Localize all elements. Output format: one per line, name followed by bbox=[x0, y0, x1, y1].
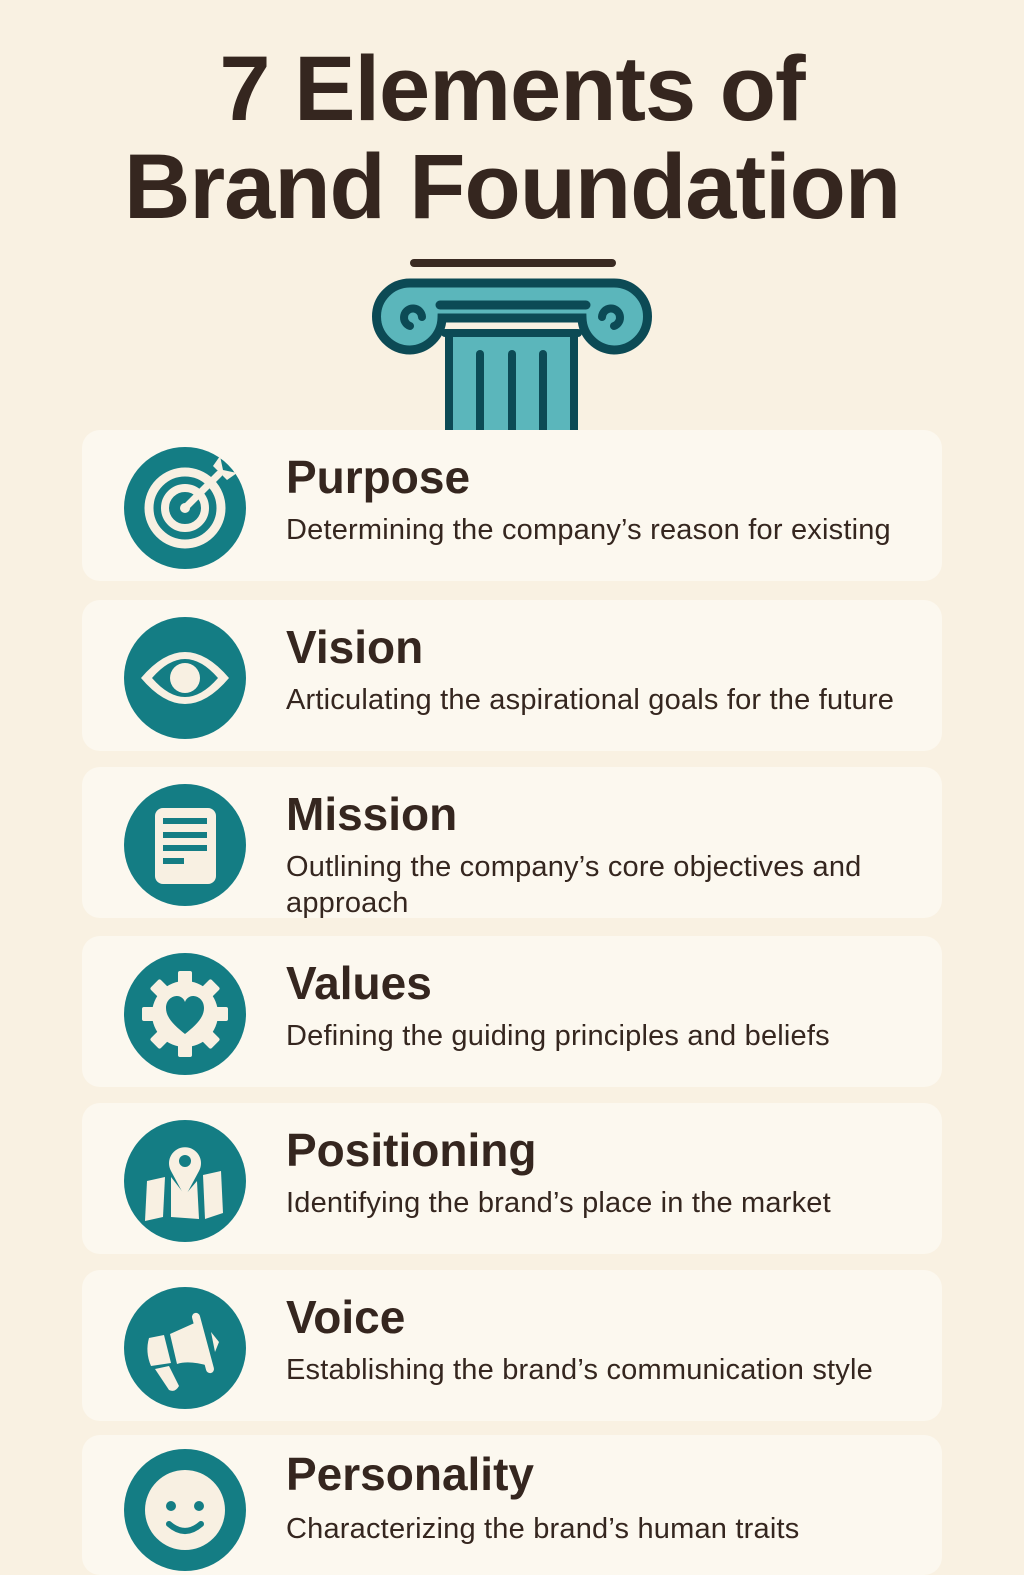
text: Identifying the brand’s place in the market bbox=[286, 1187, 831, 1219]
title: Brand Foundation bbox=[124, 136, 900, 238]
panel: mission bbox=[82, 767, 942, 918]
icon: target bbox=[124, 447, 246, 569]
text: Articulating the aspirational goals for the future bbox=[286, 684, 894, 716]
heading: Voice bbox=[286, 1291, 405, 1343]
heading: Mission bbox=[286, 788, 457, 840]
text: Establishing the brand’s communication style bbox=[286, 1354, 873, 1386]
title: 7 Elements of bbox=[219, 38, 805, 140]
icon: pillar bbox=[372, 259, 652, 430]
text: Defining the guiding principles and beliefs bbox=[286, 1020, 830, 1052]
icon: document bbox=[124, 784, 246, 906]
panel: vision bbox=[82, 600, 942, 751]
text: Characterizing the brand’s human traits bbox=[286, 1513, 799, 1545]
icon: megaphone bbox=[124, 1287, 246, 1409]
heading: Purpose bbox=[286, 451, 470, 503]
title bbox=[124, 38, 900, 238]
panel: values bbox=[82, 936, 942, 1087]
panel: positioning bbox=[82, 1103, 942, 1254]
icon: gear heart bbox=[124, 953, 246, 1075]
heading: Positioning bbox=[286, 1124, 536, 1176]
icon: map pin bbox=[124, 1120, 246, 1242]
panel: voice bbox=[82, 1270, 942, 1421]
text: Outlining the company’s core objectives and approach bbox=[286, 851, 862, 919]
icon: eye bbox=[124, 617, 246, 739]
icon: smiley bbox=[124, 1449, 246, 1571]
heading: Personality bbox=[286, 1448, 534, 1500]
panel: purpose bbox=[82, 430, 942, 581]
heading: Values bbox=[286, 957, 432, 1009]
heading: Vision bbox=[286, 621, 423, 673]
text: Determining the company’s reason for existing bbox=[286, 514, 891, 546]
panel: personality bbox=[82, 1435, 942, 1575]
